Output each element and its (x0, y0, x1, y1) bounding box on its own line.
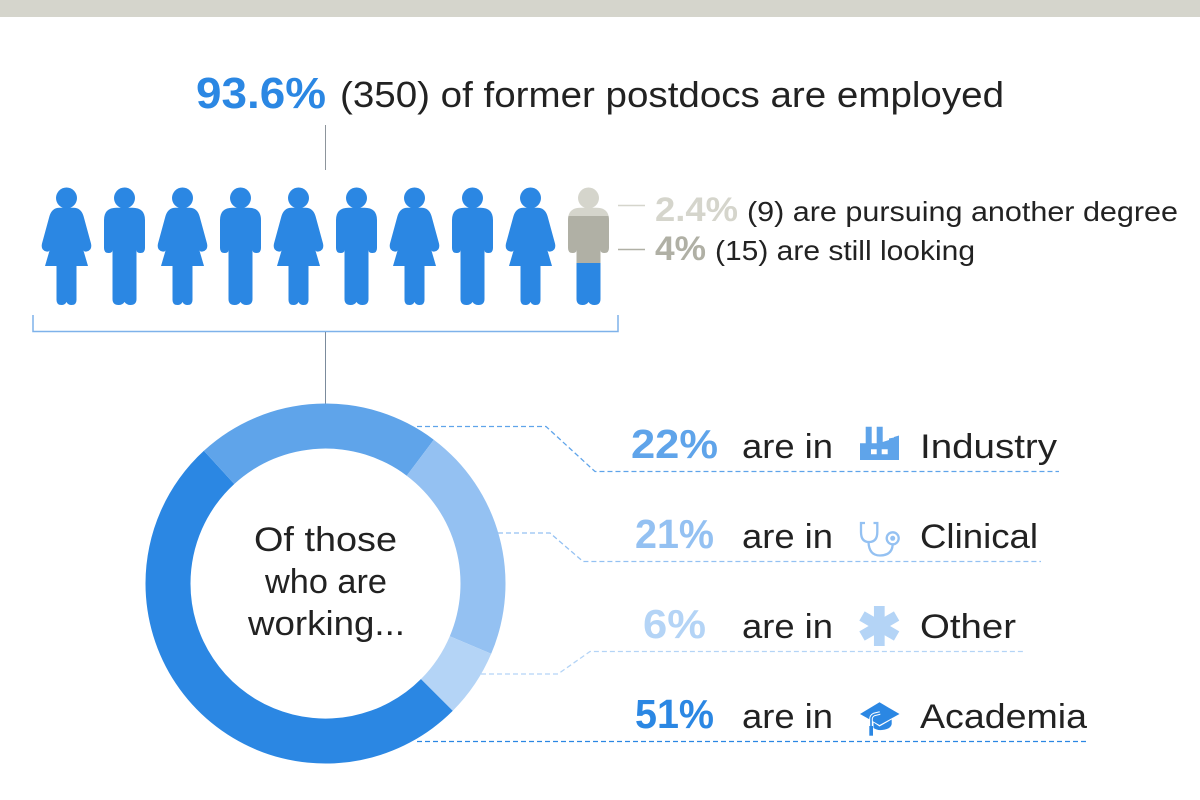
row: Clinical: Clinical (920, 518, 1038, 556)
row: Academia: 51% (635, 691, 714, 737)
row: Other: Other (920, 608, 1016, 646)
donut centre text: who are (264, 563, 387, 601)
callout: still looking: (15) are still looking (715, 235, 975, 266)
callout: pursuing another degree: (9) are pursuing another degree (747, 196, 1178, 227)
row: Clinical: 21% (635, 511, 714, 557)
segment: Other 6% (421, 636, 491, 711)
icon: factory (860, 427, 899, 460)
people row pictogram (42, 188, 609, 305)
row: Industry: 22% (631, 421, 718, 467)
connector: title to people (324, 125, 326, 170)
row: Academia: are in (742, 698, 833, 736)
row: Other (643, 601, 1016, 647)
row: Academia (635, 691, 1087, 737)
top band (0, 0, 1200, 17)
row: Academia: Academia (920, 698, 1087, 736)
icon: stethoscope (861, 523, 899, 556)
leader line: Academia (417, 740, 1087, 742)
row: Other: are in (742, 608, 833, 646)
title: 93.6% (196, 69, 326, 118)
partially coloured last person (568, 188, 609, 305)
row: Industry: are in (742, 428, 833, 466)
connector: bracket to donut (324, 332, 326, 404)
segment: Clinical 21% (407, 440, 506, 654)
callout: pursuing another degree: 2.4% (655, 191, 738, 229)
donut centre text: Of those (254, 521, 397, 559)
leader line: Clinical (498, 533, 1041, 562)
segment: Industry 22% (204, 403, 434, 484)
row: Clinical: are in (742, 518, 833, 556)
segment: Academia 51% (145, 451, 453, 764)
title (196, 69, 1004, 118)
leader line: Industry (417, 426, 1059, 472)
donut centre text: working... (247, 605, 405, 643)
callout: still looking: 4% (655, 230, 706, 268)
callout: pursuing another degree (618, 191, 1178, 229)
bracket (33, 315, 618, 332)
row: Industry (631, 421, 1057, 467)
row: Clinical (635, 511, 1038, 557)
icon: asterisk (862, 606, 897, 646)
callout: still looking (618, 230, 975, 268)
row: Industry: Industry (920, 428, 1057, 466)
donut centre text (247, 521, 405, 643)
donut chart (145, 403, 506, 764)
icon: graduation cap (860, 702, 900, 736)
row: Other: 6% (643, 601, 706, 647)
title: (350) of former postdocs are employed (340, 74, 1004, 115)
leader line: Other (481, 652, 1023, 674)
